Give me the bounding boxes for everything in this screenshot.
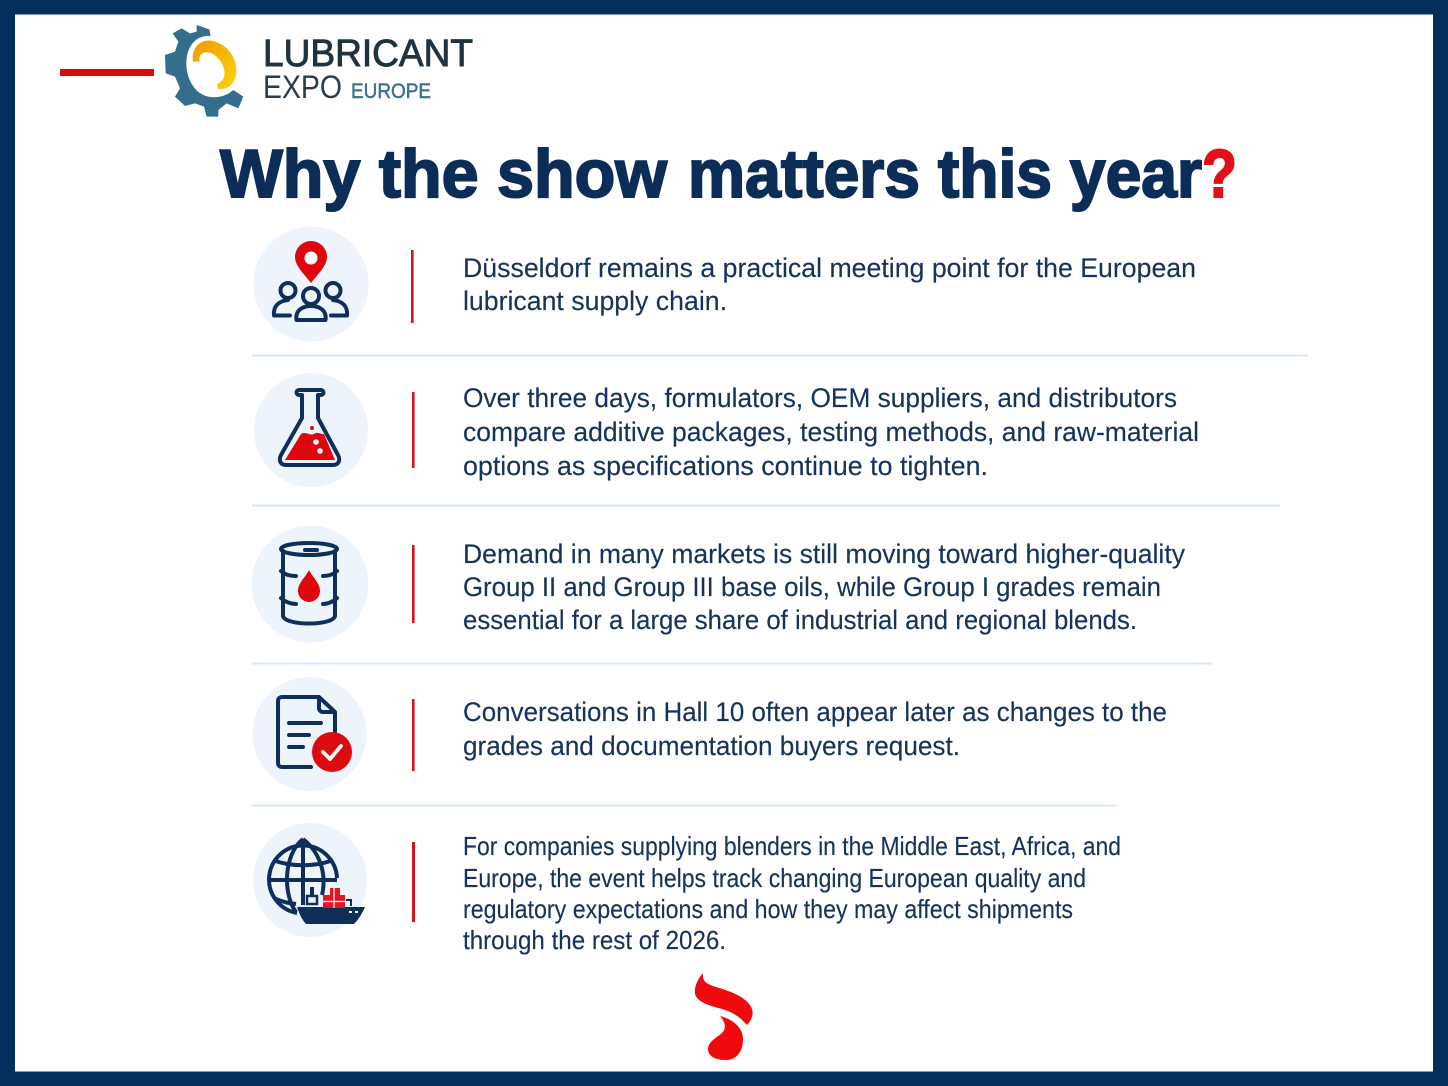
icon: gear	[165, 25, 243, 117]
logo text: EUROPE	[351, 80, 431, 103]
text	[463, 831, 1121, 955]
red separator	[412, 699, 415, 771]
row 2: laboratory	[254, 373, 1199, 487]
icon: document with check	[252, 677, 366, 791]
text	[463, 253, 1196, 316]
row 5: global shipments	[253, 823, 1121, 955]
red accent line	[60, 69, 154, 76]
text: lubricant supply chain.	[463, 286, 727, 316]
text: Demand in many markets is still moving toward higher-quality	[463, 539, 1185, 569]
text	[463, 383, 1199, 481]
title	[220, 136, 1237, 212]
red separator	[412, 545, 415, 623]
text: options as specifications continue to tighten.	[463, 451, 988, 481]
icon: oil barrel	[252, 526, 368, 642]
red separator	[412, 392, 415, 468]
text: Over three days, formulators, OEM suppliers, and distributors	[463, 383, 1177, 413]
icon: flask	[254, 373, 368, 487]
header logo	[60, 25, 473, 117]
row 1: meeting point	[254, 226, 1196, 342]
row 3: base oils	[252, 526, 1185, 642]
icon: red flame mark	[695, 973, 753, 1060]
text: through the rest of 2026.	[463, 925, 726, 955]
logo text	[263, 33, 473, 105]
text: grades and documentation buyers request.	[463, 731, 960, 761]
row 4: documentation	[252, 677, 1167, 791]
logo text: LUBRICANT	[263, 33, 473, 75]
red separator	[412, 842, 415, 922]
text	[463, 539, 1185, 635]
text: For companies supplying blenders in the Middle East, Africa, and	[463, 831, 1121, 861]
text: compare additive packages, testing methods, and raw-material	[463, 417, 1199, 447]
text: Conversations in Hall 10 often appear later as changes to the	[463, 697, 1167, 727]
title: ?	[1202, 136, 1237, 212]
text: essential for a large share of industrial and regional blends.	[463, 605, 1137, 635]
title: Why the show	[220, 136, 668, 212]
title: matters this year	[688, 136, 1202, 212]
text: Europe, the event helps track changing European quality and	[463, 863, 1086, 893]
icon: globe and cargo ship	[253, 823, 367, 937]
text: regulatory expectations and how they may affect shipments	[463, 894, 1073, 924]
text	[463, 697, 1167, 761]
text: Group II and Group III base oils, while Group I grades remain	[463, 572, 1161, 602]
icon: location pin and people	[254, 226, 368, 342]
text: Düsseldorf remains a practical meeting point for the European	[463, 253, 1196, 283]
red separator	[411, 250, 414, 323]
logo text: EXPO	[263, 69, 342, 105]
